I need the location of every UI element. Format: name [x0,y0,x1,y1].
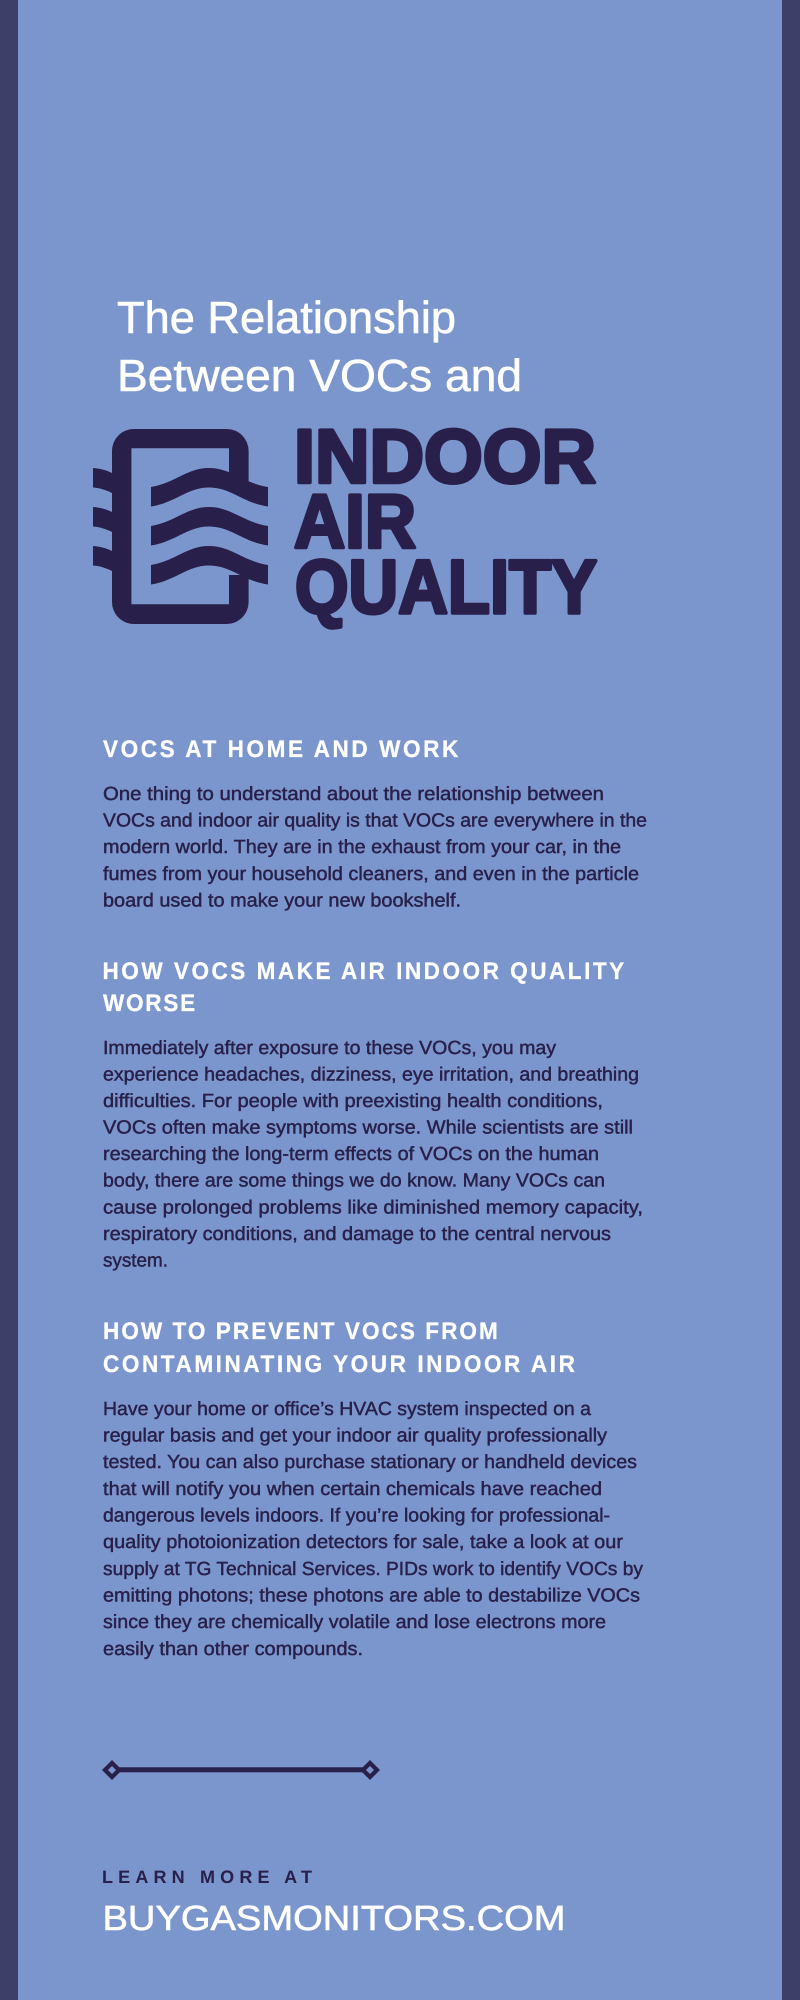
text block: how vocs make air quality worse [103,1038,643,1272]
text block: how to prevent vocs: easily than other compounds. [103,1639,363,1660]
logo wordmark: indoor air quality: QUALITY [295,545,597,630]
logo wordmark: indoor air quality: INDOOR [294,414,596,499]
logo wordmark: indoor air quality: AIR [294,479,416,564]
text block: vocs at home and work: One thing to understand about the relationship between [103,784,604,805]
heading: how to prevent vocs: CONTAMINATING YOUR INDOOR AIR [103,1351,575,1378]
heading: how vocs make air indoor quality worse: WORSE [103,990,195,1017]
icon: air filter with waves [93,429,268,624]
text block: how vocs make air quality worse: system. [103,1251,168,1272]
heading: vocs at home and work: VOCS AT HOME AND WORK [103,736,459,763]
text block: how to prevent vocs: that will notify you when certain chemicals have reached [103,1479,602,1500]
text block: how to prevent vocs: emitting photons; these photons are able to destabilize VOCs [103,1586,640,1607]
title: The Relationship [117,292,456,343]
text block: how to prevent vocs: dangerous levels indoors. If you’re looking for professional- [103,1506,610,1526]
heading: how vocs make air indoor quality worse: HOW VOCS MAKE AIR INDOOR QUALITY [102,958,624,985]
text block: how vocs make air quality worse: Immediately after exposure to these VOCs, you may [103,1038,557,1059]
divider with diamond ends [102,1760,380,1780]
text block: vocs at home and work: modern world. They are in the exhaust from your car, in the [103,837,621,858]
text block: vocs at home and work: VOCs and indoor air quality is that VOCs are everywhere in the [103,810,647,832]
text block: how to prevent vocs: quality photoionization detectors for sale, take a look at our [103,1532,624,1553]
text block: vocs at home and work: fumes from your household cleaners, and even in the particle [103,864,639,885]
text block: how to prevent vocs: Have your home or office’s HVAC system inspected on a [103,1399,591,1420]
text block: how vocs make air quality worse: respiratory conditions, and damage to the central nervous [103,1224,611,1245]
call to action label: LEARN MORE AT [102,1867,312,1887]
heading: how to prevent vocs [103,1318,575,1378]
text block: vocs at home and work [103,784,647,912]
text block: how vocs make air quality worse: researching the long-term effects of VOCs on the human [103,1144,599,1165]
text block: how vocs make air quality worse: cause prolonged problems like diminished memory capacity, [103,1198,643,1218]
text block: how vocs make air quality worse: VOCs often make symptoms worse. While scientists are still [103,1118,633,1139]
text block: how to prevent vocs: regular basis and get your indoor air quality professionally [103,1426,608,1447]
text block: vocs at home and work: board used to make your new bookshelf. [103,890,461,912]
website url: BUYGASMONITORS.COM [102,1899,566,1938]
text block: how to prevent vocs: since they are chemically volatile and lose electrons more [103,1612,606,1633]
right side bar [782,0,800,2000]
text block: how vocs make air quality worse: experience headaches, dizziness, eye irritation, and breathing [103,1064,639,1086]
text block: how to prevent vocs: tested. You can also purchase stationary or handheld devices [103,1452,637,1473]
heading: how vocs make air indoor quality worse [102,958,624,1017]
heading: how to prevent vocs: HOW TO PREVENT VOCS FROM [103,1318,498,1345]
text block: how to prevent vocs: supply at TG Technical Services. PIDs work to identify VOCs by [103,1559,644,1580]
title: Between VOCs and [117,350,522,401]
text block: how vocs make air quality worse: difficulties. For people with preexisting health conditions, [103,1091,603,1112]
text block: how to prevent vocs [103,1399,644,1660]
text block: how vocs make air quality worse: body, there are some things we do know. Many VOCs can [103,1171,605,1192]
logo wordmark: indoor air quality [294,414,597,630]
left side bar [0,0,18,2000]
title [117,292,522,401]
